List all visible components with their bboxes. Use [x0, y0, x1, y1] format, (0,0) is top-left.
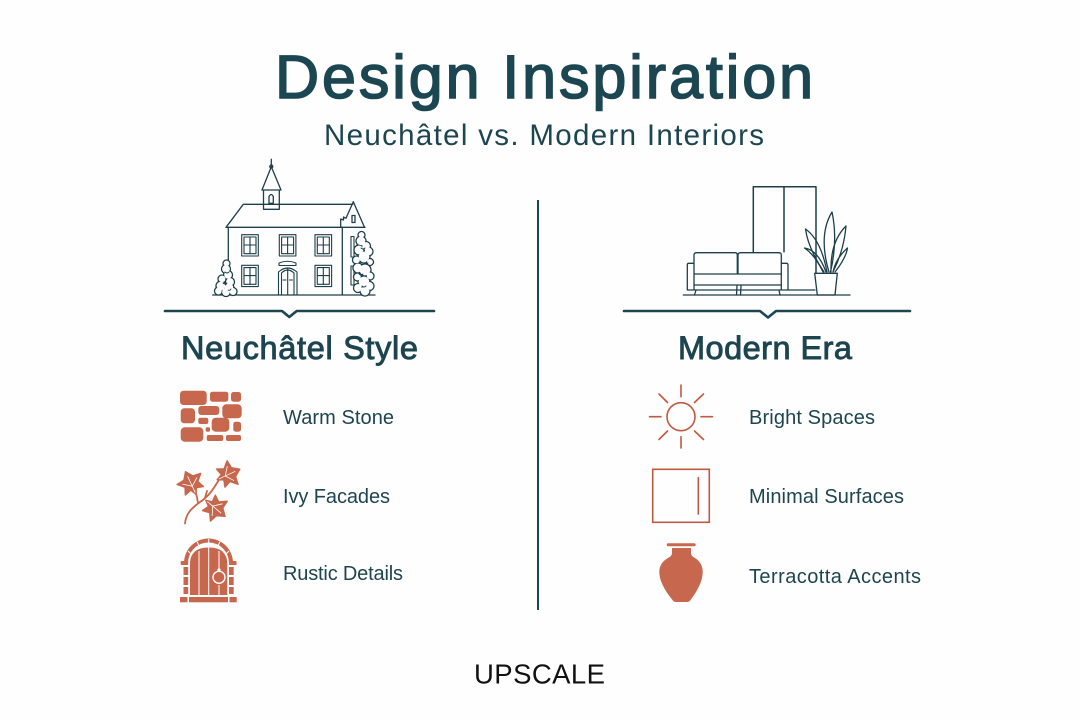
- icon: stone wall: [180, 391, 242, 442]
- heading: Modern Era: Modern Era: [678, 330, 853, 366]
- illustration: modern living room: [683, 187, 850, 295]
- label: Minimal Surfaces: Minimal Surfaces: [749, 486, 904, 508]
- panel: Neuchâtel style: [165, 159, 434, 602]
- logo: UPSCALE: UPSCALE: [474, 658, 605, 690]
- ivy on right wall: [352, 232, 374, 296]
- label: Rustic Details: Rustic Details: [283, 563, 403, 585]
- illustration: house: [213, 159, 375, 296]
- icon: sun: [650, 385, 712, 448]
- divider with chevron: [624, 311, 910, 318]
- icon: terracotta vase: [659, 543, 703, 602]
- panel: Modern era: [624, 187, 921, 602]
- label: Bright Spaces: Bright Spaces: [749, 407, 875, 429]
- title: Design Inspiration: [275, 43, 813, 111]
- icon: minimal square: [653, 469, 709, 522]
- icon: ivy branch: [174, 457, 245, 526]
- label: Terracotta Accents: Terracotta Accents: [749, 566, 921, 588]
- label: Warm Stone: Warm Stone: [283, 407, 394, 429]
- divider with chevron: [165, 311, 434, 317]
- ivy on left corner: [214, 260, 237, 296]
- heading: Neuchâtel Style: Neuchâtel Style: [181, 330, 418, 366]
- subtitle: Neuchâtel vs. Modern Interiors: [324, 119, 764, 152]
- icon: rustic door: [180, 538, 237, 602]
- label: Ivy Facades: Ivy Facades: [283, 486, 390, 508]
- center divider: [537, 200, 539, 610]
